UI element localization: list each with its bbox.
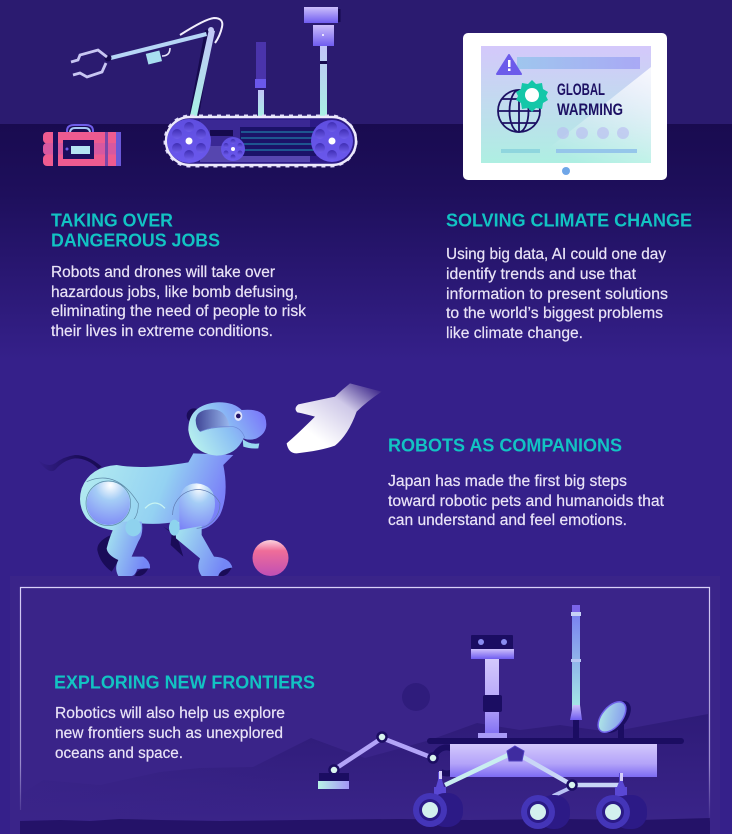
- text: exploring new frontiers: oceans and space.: [55, 745, 183, 762]
- dish: [593, 695, 637, 740]
- mountains: [20, 714, 708, 822]
- tracks: [165, 116, 356, 166]
- panel: exploring new frontiers: [10, 576, 720, 834]
- camera head: [471, 635, 514, 738]
- text: taking over dangerous jobs: hazardous jobs, like bomb defusing,: [51, 284, 298, 301]
- text: exploring new frontiers: Robotics will also help us explore: [55, 705, 285, 722]
- globe: [498, 90, 540, 132]
- heading: exploring new frontiers: EXPLORING NEW FRONTIERS: [54, 672, 315, 692]
- front leg: [175, 522, 232, 576]
- text: solving climate change: Using big data, AI could one day: [446, 246, 666, 263]
- text: exploring new frontiers: [55, 705, 285, 762]
- body: [450, 744, 657, 777]
- text: robots as companions: can understand and feel emotions.: [388, 512, 627, 529]
- alert bar: [517, 57, 640, 69]
- moon: [402, 683, 430, 711]
- tablet label: [557, 80, 623, 119]
- text: solving climate change: like climate change.: [446, 325, 583, 342]
- sun gear: [516, 80, 548, 112]
- icon: tracked bomb disposal robot: [71, 7, 356, 166]
- toe shadows: [135, 568, 232, 576]
- tail: [37, 455, 102, 471]
- wheels: [167, 119, 353, 163]
- text: taking over dangerous jobs: eliminating the need of people to risk: [51, 303, 306, 320]
- icon: bomb: [43, 125, 121, 166]
- text: robots as companions: [388, 473, 665, 529]
- text: solving climate change: to the world’s biggest problems: [446, 305, 663, 322]
- text: taking over dangerous jobs: Robots and drones will take over: [51, 264, 275, 281]
- head: [188, 402, 266, 456]
- mast: [570, 605, 582, 740]
- frame: [20, 588, 710, 822]
- middle antenna: [255, 42, 266, 117]
- heading: robots as companions: ROBOTS AS COMPANIONS: [388, 436, 622, 456]
- camera mast: [304, 7, 340, 117]
- tablet label: WARMING: [557, 100, 623, 119]
- text: solving climate change: information to present solutions: [446, 286, 668, 303]
- wheels: [413, 793, 647, 829]
- text: taking over dangerous jobs: their lives in extreme conditions.: [51, 323, 273, 340]
- arm mount: [434, 747, 460, 773]
- icon: robot dog: [37, 402, 266, 576]
- text: robots as companions: toward robotic pets and humanoids that: [388, 493, 665, 510]
- belly mark: [145, 503, 165, 508]
- text: solving climate change: [446, 246, 668, 342]
- robotic arm: [318, 732, 438, 789]
- heading: taking over dangerous jobs: TAKING OVER: [51, 210, 173, 230]
- hind leg: [107, 522, 150, 576]
- heading: solving climate change: SOLVING CLIMATE CHANGE: [446, 210, 692, 230]
- text: taking over dangerous jobs: [51, 264, 306, 340]
- gripper: [71, 50, 107, 77]
- text: exploring new frontiers: new frontiers such as unexplored: [55, 725, 283, 742]
- leg shadows: [97, 527, 183, 572]
- icon: mars rover: [318, 605, 684, 829]
- deck: [427, 738, 684, 744]
- icon: human hand: [287, 383, 382, 453]
- icon: tablet with global warming alert: [463, 33, 667, 180]
- body: [80, 453, 233, 532]
- tablet label: GLOBAL: [557, 80, 605, 99]
- heading: taking over dangerous jobs: DANGEROUS JOBS: [51, 230, 220, 250]
- text: robots as companions: Japan has made the first big steps: [388, 473, 627, 490]
- ground: [20, 818, 710, 834]
- warning triangle: [497, 55, 521, 74]
- text: solving climate change: identify trends and use that: [446, 266, 637, 283]
- suspension: [434, 746, 627, 796]
- icon: pink ball: [252, 540, 288, 576]
- heading: taking over dangerous jobs: [51, 210, 220, 250]
- robot arm: [71, 18, 222, 116]
